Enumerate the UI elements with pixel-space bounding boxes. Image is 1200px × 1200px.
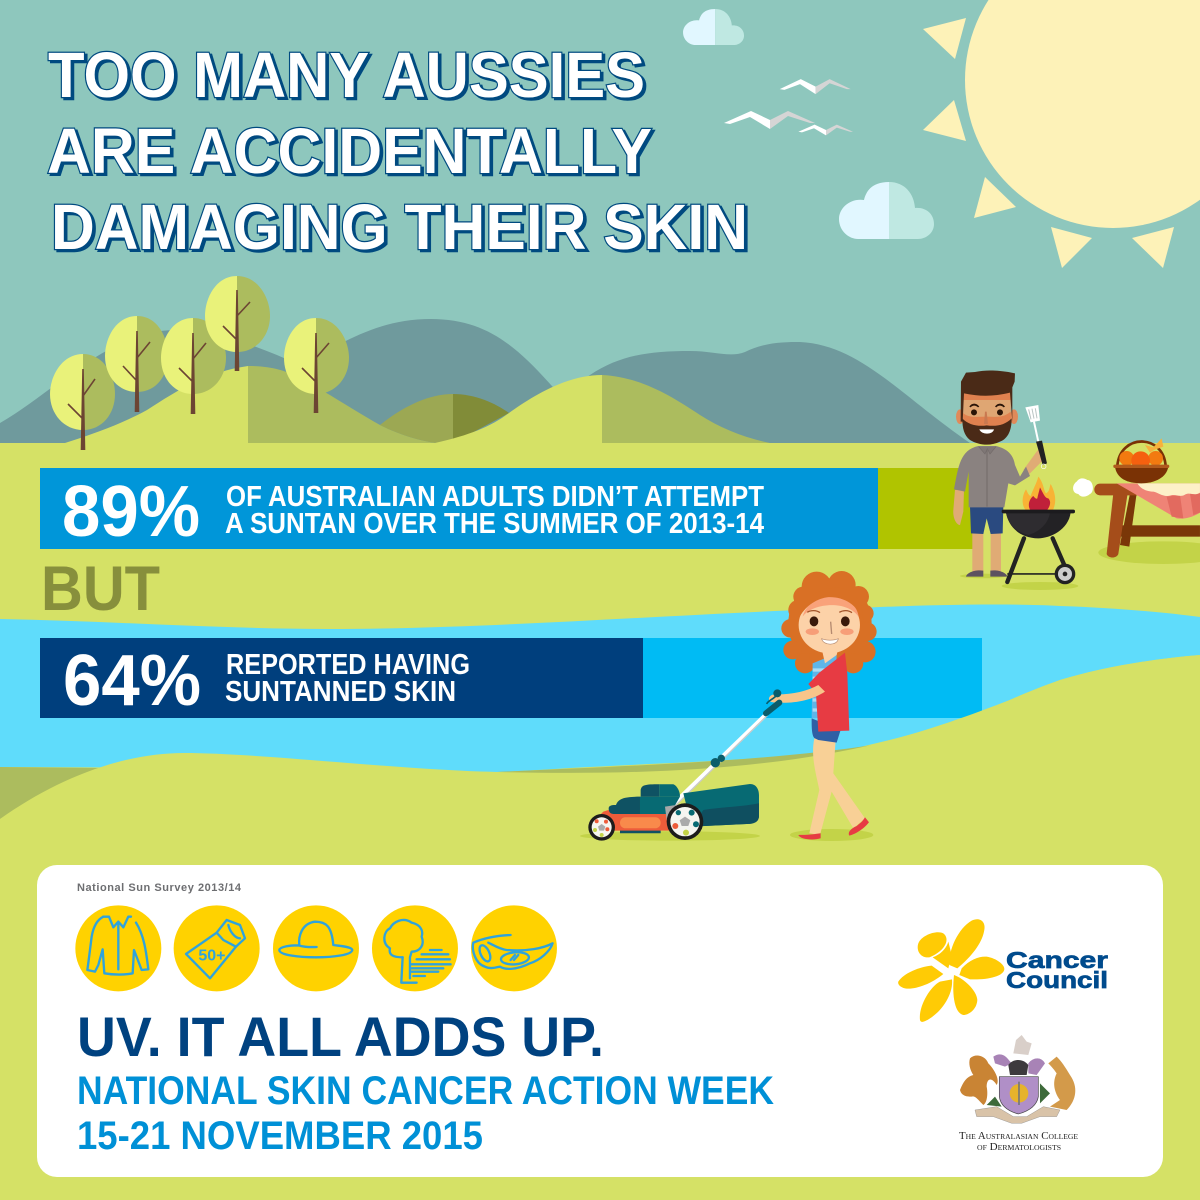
source note: National Sun Survey 2013/14 [77,882,242,894]
fruit basket [1113,438,1169,483]
cloud: large [839,182,934,239]
logo: Cancer Council: Cancer [1006,947,1108,973]
woman with lawn mower [580,571,877,841]
bar: 64 percent: 64% [63,641,201,721]
crest [960,1035,1075,1123]
title: DAMAGING THEIR SKIN [51,191,748,263]
cloud: small [683,9,744,45]
but: BUT [41,554,160,624]
red shirt [808,653,849,732]
spatula [1025,405,1047,469]
birds [724,79,853,135]
bar: 89 percent: A SUNTAN OVER THE SUMMER OF 2013-14 [225,508,764,540]
legs [972,530,1001,573]
woman shadow [790,829,873,841]
smoke [1073,478,1093,497]
dates: 15-21 NOVEMBER 2015 [77,1114,483,1158]
icon: tree shade [372,905,458,991]
icon: hat [273,905,359,991]
tree 1 [50,354,115,450]
trees [50,276,349,450]
subheading: NATIONAL SKIN CANCER ACTION WEEK [77,1069,774,1113]
left arm [953,490,964,525]
hills [65,366,770,443]
eyes [969,404,1005,415]
mountains [0,319,970,443]
mower handle [667,689,781,812]
title: TOO MANY AUSSIES [50,41,648,113]
logo: Australasian College of Dermatologists: The Australasian College [959,1131,1078,1142]
head [956,409,964,424]
face [799,597,860,653]
legs [809,738,865,835]
neck [822,648,838,663]
mower bag [683,784,759,827]
title: ARE ACCIDENTALLY [47,115,652,187]
beard [962,418,1012,445]
icon: sunscreen: 50+ [198,948,225,965]
panel: footer [37,865,1163,1177]
hair [781,571,877,673]
title: DAMAGING THEIR SKIN [54,193,750,265]
arm [769,685,825,703]
bar: 89 percent: OF AUSTRALIAN ADULTS DIDN’T ATTEMPT [226,481,764,513]
man at barbecue [953,370,1093,590]
bar: 64 percent: SUNTANNED SKIN [225,676,456,708]
tree 3 [161,318,226,414]
bar: 64 percent [40,638,982,721]
icon: sunscreen [174,905,260,991]
picnic table [1094,483,1200,564]
logo: Cancer Council [898,919,1108,1022]
logo: Australasian College of Dermatologists [959,1035,1078,1153]
right arm [1023,450,1044,475]
mower wheels [588,803,703,841]
man shadow [960,574,1007,578]
hair [961,370,1015,422]
shirt [954,446,1030,507]
grill [1002,477,1078,590]
shorts [812,718,841,743]
foreground hill [0,655,1200,870]
ground [0,443,1200,623]
mower body [598,784,680,833]
daffodil [898,919,1004,1022]
sun [923,0,1200,268]
icon: jacket [75,905,161,991]
icon: sunglasses [471,905,557,991]
tree 4 [205,276,270,371]
shoes [966,570,1007,577]
river [0,605,1200,772]
tree 5 [284,318,349,413]
shorts [970,507,1003,534]
logo: Australasian College of Dermatologists: of Dermatologists [977,1142,1061,1153]
title [47,39,750,265]
title: ARE ACCIDENTALLY [50,117,654,189]
eyes [806,611,854,644]
bar: 89 percent: 89% [62,472,200,552]
tree 2 [105,316,168,412]
bar: 64 percent: REPORTED HAVING [226,649,470,681]
title: TOO MANY AUSSIES [48,39,645,111]
logo: Cancer Council: Council [1006,967,1108,993]
heading: UV. IT ALL ADDS UP. [77,1005,604,1068]
bar: 89 percent [40,468,976,552]
shoes [798,817,869,839]
sky [0,0,1200,443]
mower shadow [580,831,760,841]
striped top [812,653,837,718]
